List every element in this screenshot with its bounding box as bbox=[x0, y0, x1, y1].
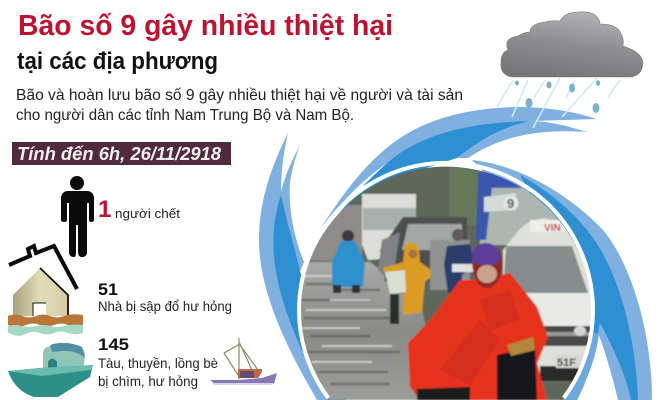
icon: flooded house bbox=[8, 246, 83, 336]
left buildings bbox=[310, 204, 363, 262]
rider in blue raincoat bbox=[332, 230, 365, 293]
house outline bbox=[40, 268, 68, 316]
icon: rain cloud bbox=[497, 12, 643, 128]
stat: houses: 51 bbox=[98, 280, 118, 299]
stat: deaths: người chết bbox=[115, 206, 180, 221]
stat: boats: bị chìm, hư hỏng bbox=[98, 373, 198, 389]
photo ring bbox=[299, 163, 593, 398]
collapsed roof bbox=[9, 246, 77, 289]
raindrops bbox=[515, 80, 600, 113]
photo: flooded street: 51F bbox=[557, 357, 576, 369]
title: tại các địa phương bbox=[17, 48, 218, 75]
stat: deaths bbox=[98, 196, 180, 223]
stat: deaths: 1 bbox=[98, 196, 111, 223]
house wall bbox=[13, 268, 68, 316]
water wave bbox=[8, 325, 83, 336]
icon: person bbox=[61, 176, 94, 257]
flood water bbox=[298, 262, 430, 400]
icon: fishing boat bbox=[210, 338, 277, 385]
photo: flooded street bbox=[298, 160, 596, 400]
dark suv bbox=[380, 217, 467, 282]
left swirl bbox=[259, 133, 345, 400]
title bbox=[17, 10, 393, 75]
photo: flooded street: VIN bbox=[544, 223, 561, 234]
rider in yellow raincoat bbox=[383, 243, 431, 324]
title: Bão số 9 gây nhiều thiệt hại bbox=[18, 10, 393, 42]
house door bbox=[33, 303, 46, 316]
date banner: Tính đến 6h, 26/11/2918 bbox=[17, 144, 221, 164]
rider in navy coat bbox=[444, 229, 474, 293]
icon: houseboat bbox=[8, 343, 93, 397]
photo: flooded street: 9 bbox=[507, 196, 514, 211]
stat: houses: Nhà bị sập đổ hư hỏng bbox=[98, 298, 232, 314]
top swirl bbox=[321, 107, 597, 230]
intro text bbox=[16, 87, 463, 124]
white taxi bbox=[502, 218, 590, 294]
mud wave bbox=[8, 314, 83, 326]
main rider in red raincoat bbox=[408, 243, 548, 400]
swirl frame bbox=[259, 107, 652, 400]
white van bbox=[362, 194, 416, 260]
intro text: Bão và hoàn lưu bão số 9 gây nhiều thiệt hại về người và tài sản bbox=[16, 87, 463, 104]
intro text: cho người dân các tỉnh Nam Trung Bộ và Nam Bộ. bbox=[16, 107, 354, 124]
right swirl bbox=[472, 160, 652, 400]
cloud body bbox=[501, 12, 643, 77]
photo background bbox=[309, 166, 572, 400]
stat: boats: 145 bbox=[98, 335, 129, 354]
stat: boats: Tàu, thuyền, lồng bè bbox=[98, 355, 218, 371]
stat: boats bbox=[98, 335, 218, 389]
bus bbox=[479, 187, 558, 246]
stat: houses bbox=[98, 280, 232, 314]
rain streaks bbox=[497, 78, 620, 128]
